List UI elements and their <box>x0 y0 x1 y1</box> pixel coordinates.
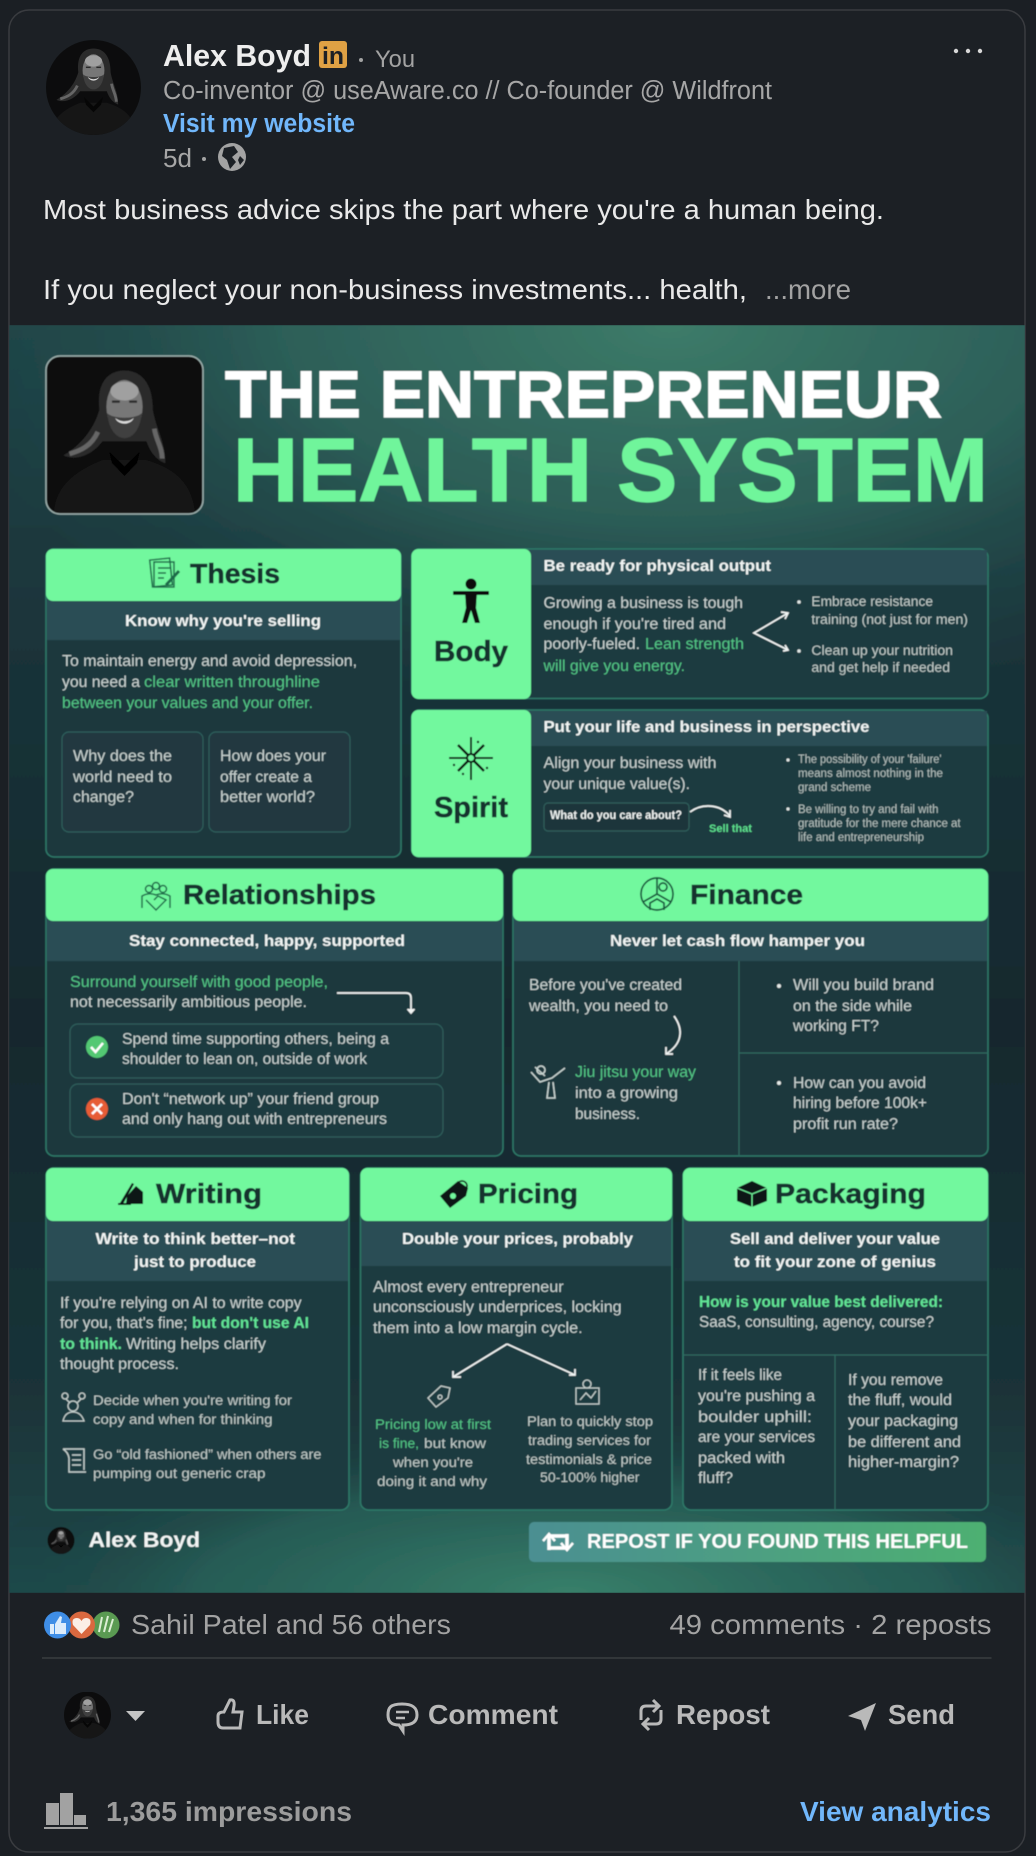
send button: Send <box>888 1699 955 1730</box>
impressions <box>44 1793 991 1829</box>
pricing option: low: but know <box>424 1436 486 1451</box>
body text: poorly-fueled. <box>544 636 640 653</box>
question box: how: offer create a <box>220 769 312 786</box>
question box: how: How does your <box>220 748 326 765</box>
icon: scroll <box>63 1449 86 1472</box>
icon: writing hand <box>118 1183 143 1205</box>
don't box <box>70 1084 443 1137</box>
icon: spirit star <box>449 737 493 780</box>
pricing text <box>373 1279 622 1337</box>
view analytics link: View analytics <box>800 1796 991 1827</box>
pricing option: low <box>375 1417 491 1489</box>
relationships heading: Relationships <box>183 879 376 910</box>
packaging subheading: to fit your zone of genius <box>734 1254 936 1271</box>
packaging subheading <box>730 1231 940 1271</box>
infographic background <box>9 325 1025 1593</box>
question box: why: Why does the <box>73 748 172 765</box>
panel: thesis <box>46 549 401 857</box>
icon: repost <box>543 1534 573 1550</box>
spirit bullets: means almost nothing in the <box>798 768 943 780</box>
portrait photo <box>46 356 203 514</box>
action bar <box>64 1692 955 1739</box>
pricing option: raise: trading services for <box>528 1433 652 1448</box>
do box: shoulder to lean on, outside of work <box>122 1051 367 1068</box>
writing tip: decide <box>93 1393 293 1427</box>
infographic author: Alex Boyd <box>88 1529 200 1552</box>
author avatar <box>46 40 141 135</box>
question box: how <box>209 732 350 832</box>
repost call to action: REPOST IF YOU FOUND THIS HELPFUL <box>587 1531 968 1553</box>
icon: bar chart <box>44 1793 88 1829</box>
question box: why: world need to <box>72 769 172 786</box>
body text: Lean strength <box>645 636 744 653</box>
body bullets: and get help if needed <box>811 660 950 675</box>
question box: why: change? <box>73 789 134 806</box>
icon: globe <box>202 143 246 171</box>
relationships subheading: Stay connected, happy, supported <box>129 933 405 950</box>
infographic <box>9 325 1025 1593</box>
writing text: thought process. <box>60 1356 179 1373</box>
icon: low price tag <box>428 1386 450 1407</box>
finance subheading: Never let cash flow hamper you <box>610 933 865 950</box>
spirit bullets <box>786 754 961 844</box>
finance question: brand: Will you build brand <box>793 977 934 994</box>
arrow: down to jiu jitsu <box>666 1016 680 1054</box>
question box: what do you care about <box>544 803 689 831</box>
finance heading: Finance <box>690 879 803 910</box>
packaging right column: higher-margin? <box>848 1454 959 1471</box>
packaging question: How is your value best delivered: <box>699 1294 943 1311</box>
jiu jitsu text <box>575 1064 696 1123</box>
question box: how: better world? <box>220 789 315 806</box>
jiu jitsu text: into a growing <box>575 1085 678 1102</box>
author header <box>46 38 982 173</box>
finance text: Before you've created <box>529 977 682 994</box>
pricing text: unconsciously underprices, locking <box>373 1299 622 1316</box>
body text: enough if you're tired and <box>544 616 726 633</box>
packaging left column: packed with <box>698 1450 785 1467</box>
writing tip: decide: copy and when for thinking <box>93 1412 272 1427</box>
relationships text: Surround yourself with good people, <box>70 974 328 991</box>
icon: raise prices chart <box>576 1380 599 1404</box>
body text <box>542 595 744 675</box>
thesis text: between your values and your offer. <box>62 695 313 712</box>
don't box: Don't “network up” your friend group <box>122 1091 379 1108</box>
do box <box>70 1024 443 1078</box>
writing subheading <box>96 1231 296 1271</box>
body subheading: Be ready for physical output <box>544 558 772 575</box>
thesis heading: Thesis <box>190 558 280 589</box>
author name: Alex Boyd <box>163 38 311 73</box>
icon: check <box>86 1036 108 1058</box>
panel: pricing <box>360 1168 672 1510</box>
pricing option: raise: testimonials & price <box>526 1452 652 1467</box>
sell that label: Sell that <box>709 823 752 835</box>
spirit subheading: Put your life and business in perspective <box>544 719 870 736</box>
writing text <box>60 1295 309 1373</box>
icon: decide person <box>62 1393 85 1421</box>
post age: 5d <box>163 145 192 173</box>
repost call to action <box>529 1522 986 1562</box>
pricing subheading: Double your prices, probably <box>402 1231 633 1248</box>
body bullets: Embrace resistance <box>811 594 933 609</box>
thesis text: clear written throughline <box>144 674 320 691</box>
packaging left column: boulder uphill: <box>698 1409 812 1426</box>
spirit heading: Spirit <box>434 792 508 824</box>
spirit text: Align your business with <box>544 755 716 772</box>
title: HEALTH SYSTEM <box>233 421 988 521</box>
icon: more menu <box>954 49 982 53</box>
do box: Spend time supporting others, being a <box>122 1031 389 1048</box>
post text <box>43 194 884 305</box>
finance question: brand: working FT? <box>792 1018 879 1035</box>
writing subheading: Write to think better–not <box>96 1231 296 1248</box>
actor selector <box>64 1692 145 1739</box>
writing text: but don't use AI <box>192 1315 309 1332</box>
pricing text: Almost every entrepreneur <box>373 1279 564 1296</box>
icon: cross <box>86 1098 108 1120</box>
comment button: Comment <box>428 1699 558 1730</box>
panel: relationships <box>46 869 503 1156</box>
icon: linkedin badge: in <box>322 43 344 70</box>
writing tip: old fashioned <box>93 1447 322 1481</box>
body bullets <box>797 594 968 675</box>
infographic author <box>48 1527 200 1554</box>
panel: packaging <box>683 1168 988 1510</box>
panel: finance <box>513 869 988 1156</box>
icon: price tag <box>440 1181 468 1208</box>
like button: Like <box>256 1699 309 1730</box>
writing text: Writing helps clarify <box>126 1336 266 1353</box>
writing tip: old fashioned: pumping out generic crap <box>93 1466 266 1481</box>
website link: Visit my website <box>163 110 355 138</box>
jiu jitsu text: Jiu jitsu your way <box>575 1064 696 1081</box>
packaging subheading: Sell and deliver your value <box>730 1231 940 1248</box>
like button <box>218 1699 309 1730</box>
body bullets: training (not just for men) <box>811 612 968 627</box>
pricing option: raise: 50-100% higher <box>540 1470 640 1485</box>
pricing option: low: is fine, <box>379 1436 419 1451</box>
packaging right column: If you remove <box>848 1372 943 1389</box>
social counts <box>44 1609 992 1640</box>
post text: Most business advice skips the part where you're a human being. <box>43 194 884 225</box>
body bullets: Clean up your nutrition <box>811 643 953 658</box>
writing text: for you, that's fine; <box>60 1315 188 1332</box>
writing heading: Writing <box>156 1178 262 1209</box>
social counts: 49 comments · 2 reposts <box>670 1609 992 1640</box>
writing text: to think. <box>60 1336 122 1353</box>
finance text: wealth, you need to <box>528 998 668 1015</box>
arrows: pricing branches <box>453 1344 575 1377</box>
packaging question: SaaS, consulting, agency, course? <box>699 1314 934 1331</box>
title: THE ENTREPRENEUR <box>225 357 942 431</box>
packaging right column: your packaging <box>848 1413 958 1430</box>
panel: writing <box>46 1168 349 1510</box>
writing tip: old fashioned: Go “old fashioned” when others are <box>93 1447 322 1462</box>
writing tip: decide: Decide when you're writing for <box>93 1393 293 1408</box>
impressions: 1,365 impressions <box>106 1796 352 1827</box>
icon: body figure <box>453 578 489 623</box>
packaging right column: the fluff, would <box>848 1392 952 1409</box>
author headline: Co-inventor @ useAware.co // Co-founder @ Wildfront <box>163 77 772 105</box>
thesis text <box>62 653 357 712</box>
spirit text <box>544 755 716 793</box>
icon: thesis papers <box>150 558 179 587</box>
finance question: brand: on the side while <box>793 998 912 1015</box>
connection label: You <box>375 46 415 73</box>
packaging left column <box>698 1367 815 1487</box>
body text: Growing a business is tough <box>544 595 743 612</box>
icon: box <box>737 1181 767 1207</box>
post text: ...more <box>765 274 851 305</box>
pricing option: low: when you're <box>392 1455 473 1470</box>
packaging right column: be different and <box>848 1434 961 1451</box>
send button <box>848 1699 955 1731</box>
post text: If you neglect your non-business investments... health, <box>43 274 747 305</box>
spirit bullets: Be willing to try and fail with <box>798 804 938 816</box>
pricing text: them into a low margin cycle. <box>373 1320 583 1337</box>
title <box>225 357 988 521</box>
body heading: Body <box>434 636 508 668</box>
spirit bullets: grand scheme <box>798 782 871 794</box>
panel: body <box>412 549 988 699</box>
finance question: hiring <box>777 1075 927 1133</box>
icon: jiu jitsu figure <box>531 1066 565 1098</box>
arrows: body branches <box>754 612 788 651</box>
packaging heading: Packaging <box>775 1178 926 1209</box>
relationships text <box>70 974 328 1011</box>
pricing option: raise <box>526 1414 653 1485</box>
relationships text: not necessarily ambitious people. <box>70 994 307 1011</box>
finance question: hiring: hiring before 100k+ <box>793 1095 927 1112</box>
packaging left column: fluff? <box>698 1470 733 1487</box>
pricing option: low: doing it and why <box>377 1474 487 1489</box>
finance question: hiring: profit run rate? <box>793 1116 898 1133</box>
spirit bullets: gratitude for the mere chance at <box>798 818 961 830</box>
body text: will give you energy. <box>542 658 685 675</box>
repost button: Repost <box>676 1699 770 1730</box>
spirit bullets: life and entrepreneurship <box>798 832 924 844</box>
icon: reactions <box>44 1612 120 1638</box>
pricing option: low: Pricing low at first <box>375 1417 491 1432</box>
finance question: brand <box>777 977 934 1035</box>
thesis text: To maintain energy and avoid depression, <box>62 653 357 670</box>
packaging left column: If it feels like <box>698 1367 782 1384</box>
jiu jitsu text: business. <box>575 1106 640 1123</box>
packaging question <box>699 1294 943 1331</box>
finance text <box>528 977 682 1015</box>
panel: spirit <box>412 710 988 857</box>
thesis text: you need a <box>62 674 140 691</box>
icon: finance pie <box>641 878 673 910</box>
arrow: to sell that <box>690 806 730 817</box>
packaging left column: are your services <box>698 1429 815 1446</box>
icon: handshake group <box>142 882 170 910</box>
writing text: If you're relying on AI to write copy <box>60 1295 302 1312</box>
packaging left column: you're pushing a <box>698 1388 815 1405</box>
pricing option: raise: Plan to quickly stop <box>527 1414 653 1429</box>
pricing heading: Pricing <box>478 1178 578 1209</box>
question box: why <box>62 732 203 832</box>
don't box: and only hang out with entrepreneurs <box>122 1111 387 1128</box>
social counts: Sahil Patel and 56 others <box>131 1609 451 1640</box>
thesis subheading: Know why you're selling <box>125 613 321 630</box>
packaging right column <box>848 1372 961 1471</box>
writing subheading: just to produce <box>133 1254 256 1271</box>
finance question: hiring: How can you avoid <box>793 1075 926 1092</box>
question box: what do you care about: What do you care about? <box>550 810 682 822</box>
arrow: to do and don't <box>337 993 414 1013</box>
spirit bullets: The possibility of your 'failure' <box>798 754 942 766</box>
spirit text: your unique value(s). <box>544 776 690 793</box>
